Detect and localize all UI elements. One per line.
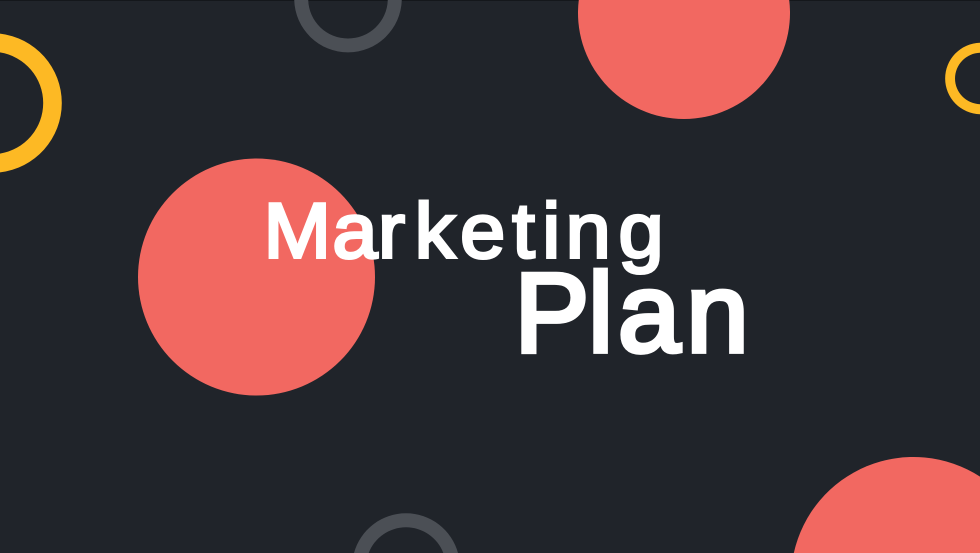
icon: yellow ring right bbox=[945, 43, 980, 114]
icon: large coral circle center-left bbox=[138, 158, 375, 396]
icon: yellow ring left bbox=[0, 34, 62, 172]
icon: coral circle bottom right bbox=[794, 457, 980, 553]
icon: coral circle top bbox=[578, 0, 790, 119]
title bbox=[264, 187, 749, 376]
icon: grey ring bottom bbox=[354, 513, 458, 553]
title line: Marketing: Marketing bbox=[264, 187, 664, 274]
icon: grey ring top bbox=[294, 0, 402, 52]
title line: Plan: Plan bbox=[514, 251, 749, 376]
